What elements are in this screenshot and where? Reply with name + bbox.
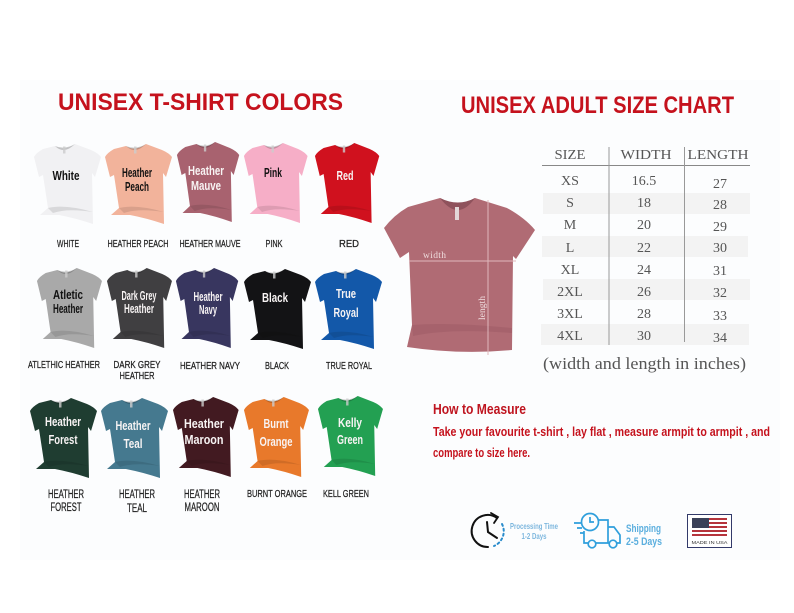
shirt: true royal: True: [336, 286, 356, 301]
table rows: 20: [637, 218, 651, 233]
shirt: heather maroon: [173, 397, 239, 514]
table header: LENGTH: [688, 148, 748, 163]
shipping text: 2-5 Days: [626, 536, 662, 548]
shirt: heather forest: HEATHER: [48, 489, 84, 501]
shirt: red: [315, 143, 379, 250]
shirt: dark grey heather: DARK GREY: [114, 359, 160, 371]
table rows: 33: [713, 309, 727, 324]
shirt: heather navy: Heather: [194, 289, 222, 304]
table rows: 27: [713, 177, 727, 192]
how to measure text: [433, 425, 770, 460]
shirt: heather navy: [176, 268, 240, 372]
shirt: pink: [244, 143, 308, 250]
shirt: heather teal: [101, 398, 168, 515]
shirt: dark grey heather: Dark Grey: [122, 288, 157, 303]
shirt: athletic heather: ATLETHIC HEATHER: [28, 359, 100, 371]
shipping text: Shipping: [626, 523, 661, 535]
shirt: heather forest: Forest: [48, 432, 78, 447]
table rows: 30: [713, 241, 727, 256]
processing time text: [510, 521, 558, 541]
measurement shirt: [384, 198, 535, 355]
shirt: heather teal: TEAL: [127, 503, 147, 515]
shirt: black: BLACK: [265, 360, 289, 372]
shirt: dark grey heather: Heather: [124, 301, 154, 316]
shirt: dark grey heather: HEATHER: [120, 370, 155, 382]
icon: shipping truck: [574, 514, 620, 548]
table rows: [557, 174, 727, 346]
shipping text: [626, 523, 662, 548]
table rows: L: [566, 241, 574, 256]
table header: WIDTH: [620, 148, 672, 163]
icon: processing clock: [472, 513, 504, 547]
shirt: burnt orange: Burnt: [264, 416, 289, 431]
shirt: heather mauve: HEATHER MAUVE: [180, 238, 240, 250]
shirt: dark grey heather: [107, 268, 172, 382]
shirt: burnt orange: Orange: [260, 434, 292, 449]
shirt: athletic heather: [28, 268, 102, 371]
shirt: athletic heather: Heather: [53, 301, 83, 316]
shirt: heather teal: Heather: [116, 418, 150, 433]
shirt: heather peach: Peach: [125, 179, 149, 194]
shirt: black: Black: [262, 290, 289, 305]
badge: made in usa flag: [688, 514, 732, 548]
shirt: kelly green: [318, 396, 383, 500]
how to measure text: compare to size here.: [433, 446, 530, 460]
table rows: 26: [637, 285, 651, 300]
measurement shirt: width: [423, 251, 446, 261]
shirt: pink: PINK: [266, 238, 282, 250]
title: size chart: UNISEX ADULT SIZE CHART: [461, 92, 734, 119]
table rows: 30: [637, 329, 651, 344]
table rows: 24: [637, 263, 651, 278]
shirt: heather teal: Teal: [124, 436, 142, 451]
table rows: 18: [637, 196, 651, 211]
table rows: 28: [637, 307, 651, 322]
shirt: true royal: [315, 269, 382, 372]
shirt: heather maroon: HEATHER: [184, 489, 220, 501]
shirt: heather mauve: [177, 142, 240, 250]
shirt: true royal: TRUE ROYAL: [326, 360, 372, 372]
table rows: 3XL: [557, 307, 583, 322]
table header: SIZE: [554, 148, 586, 163]
shirt: red: Red: [336, 168, 354, 183]
shirt: heather forest: FOREST: [50, 502, 82, 514]
shirt: white: [34, 144, 101, 250]
shirt: heather navy: Navy: [199, 302, 217, 317]
shirt: heather forest: [30, 398, 97, 514]
table rows: 16.5: [632, 174, 656, 189]
table rows: 31: [713, 264, 727, 279]
shirt: athletic heather: Atletic: [53, 287, 83, 302]
shirt: burnt orange: [244, 397, 309, 500]
shirt: red: RED: [339, 238, 359, 250]
size chart table: [541, 147, 750, 346]
shirt: heather peach: HEATHER PEACH: [108, 238, 168, 250]
badge: made in usa flag: MADE IN USA: [692, 540, 728, 545]
shirt: heather maroon: Maroon: [184, 432, 224, 447]
processing time text: 1-2 Days: [522, 531, 547, 541]
shirt: true royal: Royal: [334, 305, 358, 320]
table rows: 32: [713, 286, 727, 301]
shirt: black: [244, 269, 311, 372]
table rows: 22: [637, 241, 651, 256]
table rows: 28: [713, 198, 727, 213]
shirt: heather peach: Heather: [122, 165, 152, 180]
shirt: kelly green: Kelly: [338, 415, 363, 430]
shirt: heather navy: HEATHER NAVY: [180, 360, 240, 372]
shirt: heather forest: Heather: [45, 414, 81, 429]
how to measure heading: How to Measure: [433, 401, 526, 418]
shirt: heather maroon: Heather: [184, 416, 224, 431]
table rows: 34: [713, 331, 727, 346]
shirt: heather mauve: Mauve: [191, 178, 221, 193]
measurement shirt: length: [478, 296, 488, 320]
shirt: heather peach: [105, 144, 172, 250]
table rows: 29: [713, 220, 727, 235]
shirt: heather teal: HEATHER: [119, 489, 155, 501]
table rows: 4XL: [557, 329, 583, 344]
table rows: S: [566, 196, 574, 211]
shirt: pink: Pink: [264, 165, 282, 180]
table rows: 2XL: [557, 285, 583, 300]
table rows: XS: [561, 174, 579, 189]
shirt: heather mauve: Heather: [188, 163, 224, 178]
tinted content area: [20, 80, 780, 560]
table rows: XL: [561, 263, 579, 278]
table header: [554, 148, 748, 163]
title: t-shirt colors: UNISEX T-SHIRT COLORS: [58, 89, 343, 116]
shirt: kelly green: Green: [337, 432, 363, 447]
processing time text: Processing Time: [510, 521, 558, 531]
shirt: burnt orange: BURNT ORANGE: [247, 488, 307, 500]
table rows: M: [564, 218, 577, 233]
shirt: heather maroon: MAROON: [184, 502, 220, 514]
shirt: white: WHITE: [57, 238, 79, 250]
shirt: kelly green: KELL GREEN: [323, 488, 369, 500]
shirt: white: White: [52, 168, 80, 183]
size chart footnote: (width and length in inches): [543, 354, 746, 373]
